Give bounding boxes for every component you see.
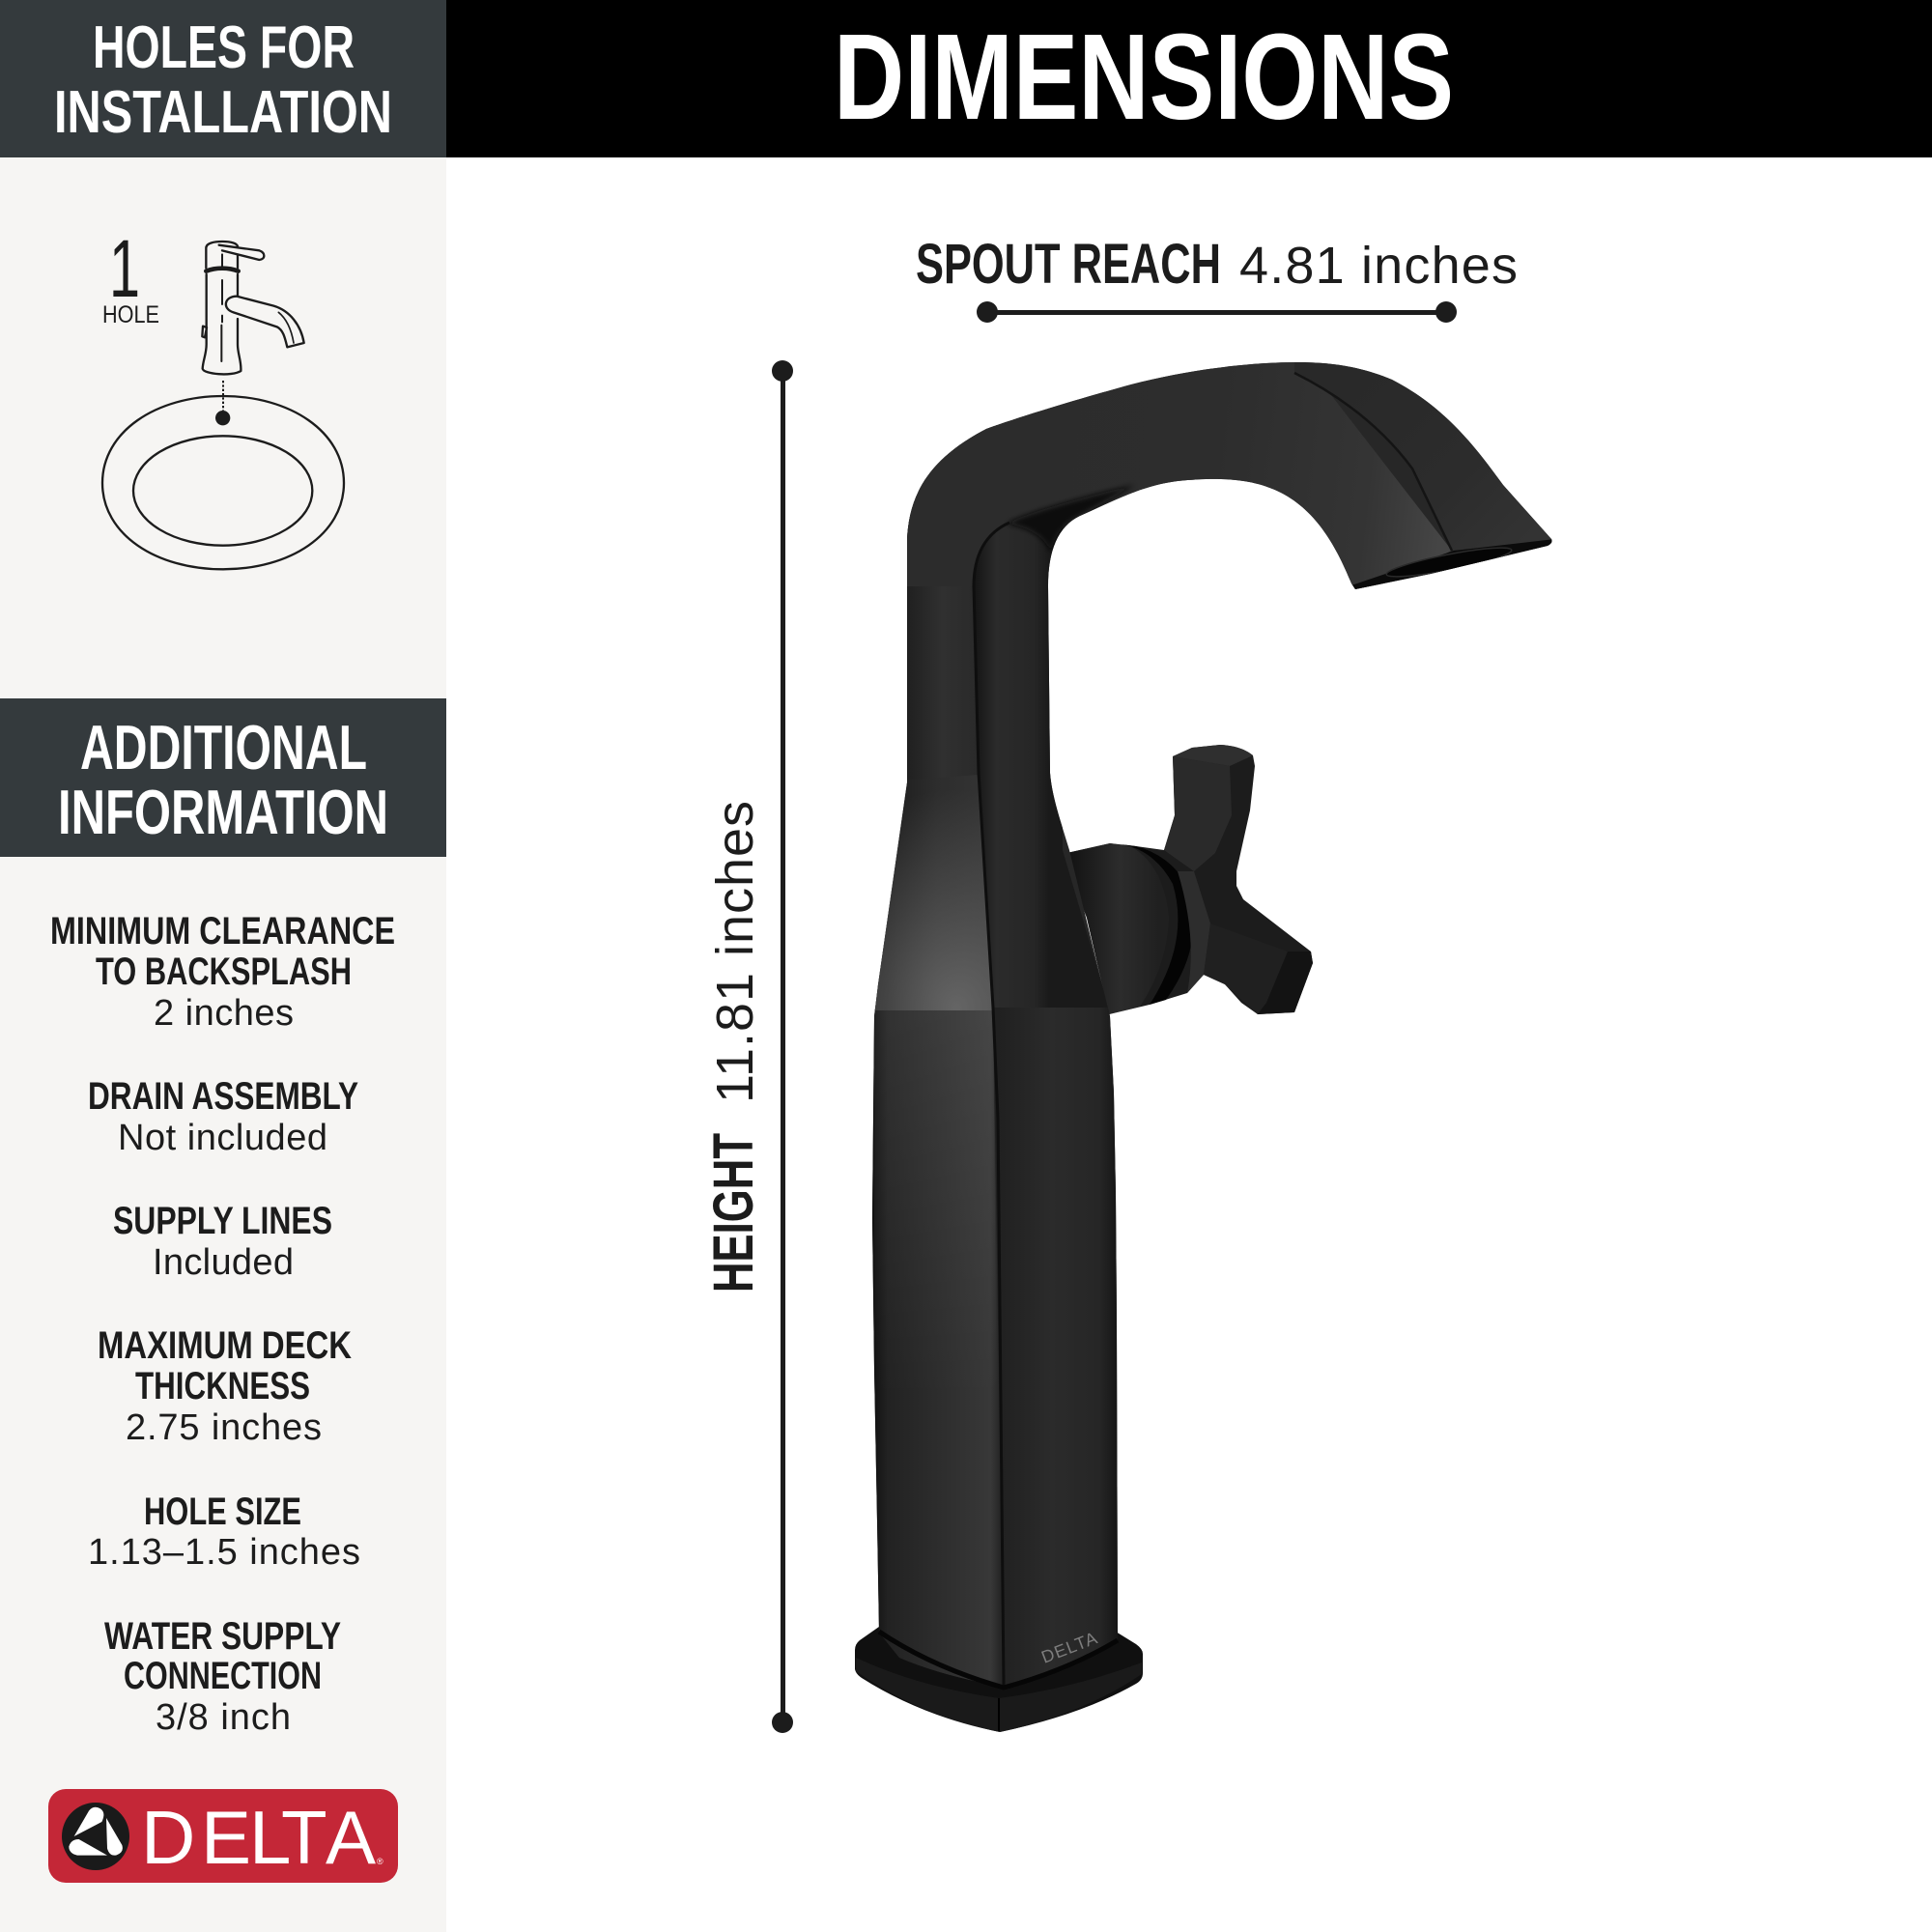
spec: maximum deck thickness: 2.75 inches xyxy=(126,1407,322,1448)
spout: aerator detail xyxy=(1385,547,1513,578)
dimension: height label: HEIGHT xyxy=(702,1133,765,1293)
header: additional information: ADDITIONAL xyxy=(80,712,367,782)
handle: black ring xyxy=(1122,844,1193,1005)
faucet: shadow at base xyxy=(879,1632,1118,1688)
header: holes for installation xyxy=(0,0,446,157)
handle: upper arm front xyxy=(1164,756,1232,871)
diagram: one hole installation: HOLE xyxy=(102,301,159,328)
faucet: handle xyxy=(1063,745,1313,1014)
spec: drain assembly xyxy=(88,1075,358,1158)
spec: water supply connection: CONNECTION xyxy=(124,1655,322,1697)
diagram: one hole installation: 1 xyxy=(109,223,140,314)
spec: water supply connection xyxy=(104,1615,341,1738)
spec: hole size: HOLE SIZE xyxy=(144,1491,301,1533)
logo: delta: ® xyxy=(377,1857,384,1866)
title bar: dimensions: DIMENSIONS xyxy=(834,9,1454,145)
header: additional information xyxy=(0,698,446,857)
handle: lower arm front xyxy=(1204,923,1288,1014)
spec: water supply connection: WATER SUPPLY xyxy=(104,1615,341,1658)
body: central ridge xyxy=(974,523,1009,1686)
body: neck left face xyxy=(907,425,997,775)
handle: hub xyxy=(1063,843,1169,1014)
logo: delta xyxy=(48,1789,398,1883)
spec: drain assembly: DRAIN ASSEMBLY xyxy=(88,1075,358,1118)
spec: maximum deck thickness: THICKNESS xyxy=(135,1365,310,1407)
body: lower left face xyxy=(872,1009,995,1683)
arrow: height dimension line xyxy=(772,360,793,1733)
faucet: body with clipped shading xyxy=(850,348,1565,1700)
dimension: spout reach label xyxy=(916,233,1518,296)
panel: left sidebar xyxy=(0,0,446,1932)
spec: maximum deck thickness xyxy=(98,1324,352,1448)
spec: supply lines: Included xyxy=(153,1242,294,1283)
spout: aerator xyxy=(1351,539,1555,593)
body: lower left sheen xyxy=(874,1010,995,1202)
spout: crease xyxy=(1294,373,1452,551)
spout: front face xyxy=(907,362,1451,589)
arrow: spout reach dimension line xyxy=(977,301,1457,323)
spout: tip facet xyxy=(1303,362,1551,551)
body: mid left glow xyxy=(875,827,992,1010)
handle: grey disc xyxy=(1178,871,1210,993)
spec: drain assembly: Not included xyxy=(118,1118,327,1158)
dimension: height label xyxy=(702,801,765,1293)
spec: supply lines: SUPPLY LINES xyxy=(113,1200,332,1242)
faucet: engraved delta mark: DELTA xyxy=(1038,1629,1099,1667)
spec: minimum clearance xyxy=(50,910,395,1034)
logo: delta: DELTA xyxy=(141,1795,376,1880)
handle: lower arm end xyxy=(1258,952,1313,1014)
header: additional information: INFORMATION xyxy=(58,777,388,847)
spec: maximum deck thickness: MAXIMUM DECK xyxy=(98,1324,352,1367)
dimension: spout reach label: 4.81 inches xyxy=(1239,237,1518,295)
spec: minimum clearance: MINIMUM CLEARANCE xyxy=(50,910,395,952)
header: holes for installation: HOLES FOR xyxy=(93,14,355,81)
handle: upper arm top xyxy=(1173,745,1253,766)
faucet photo xyxy=(850,348,1565,1732)
body: mid left face xyxy=(875,775,984,1010)
spec: minimum clearance: 2 inches xyxy=(154,993,294,1034)
dimension: spout reach label: SPOUT REACH xyxy=(916,233,1221,296)
body: lower right face xyxy=(995,1008,1118,1643)
spec: supply lines xyxy=(113,1200,332,1283)
dimension: height label: 11.81 inches xyxy=(706,801,764,1103)
spec: water supply connection: 3/8 inch xyxy=(156,1697,291,1738)
spec: hole size xyxy=(88,1491,360,1573)
title bar: dimensions xyxy=(446,0,1932,157)
diagram: one hole installation xyxy=(102,223,344,569)
body: neck right face xyxy=(974,522,1111,1014)
spout: underside shadow xyxy=(1007,485,1135,553)
spec: hole size: 1.13–1.5 inches xyxy=(88,1532,360,1573)
faucet: deck plate xyxy=(855,1627,1143,1732)
header: holes for installation: INSTALLATION xyxy=(54,79,392,146)
spec: minimum clearance: TO BACKSPLASH xyxy=(96,951,352,993)
